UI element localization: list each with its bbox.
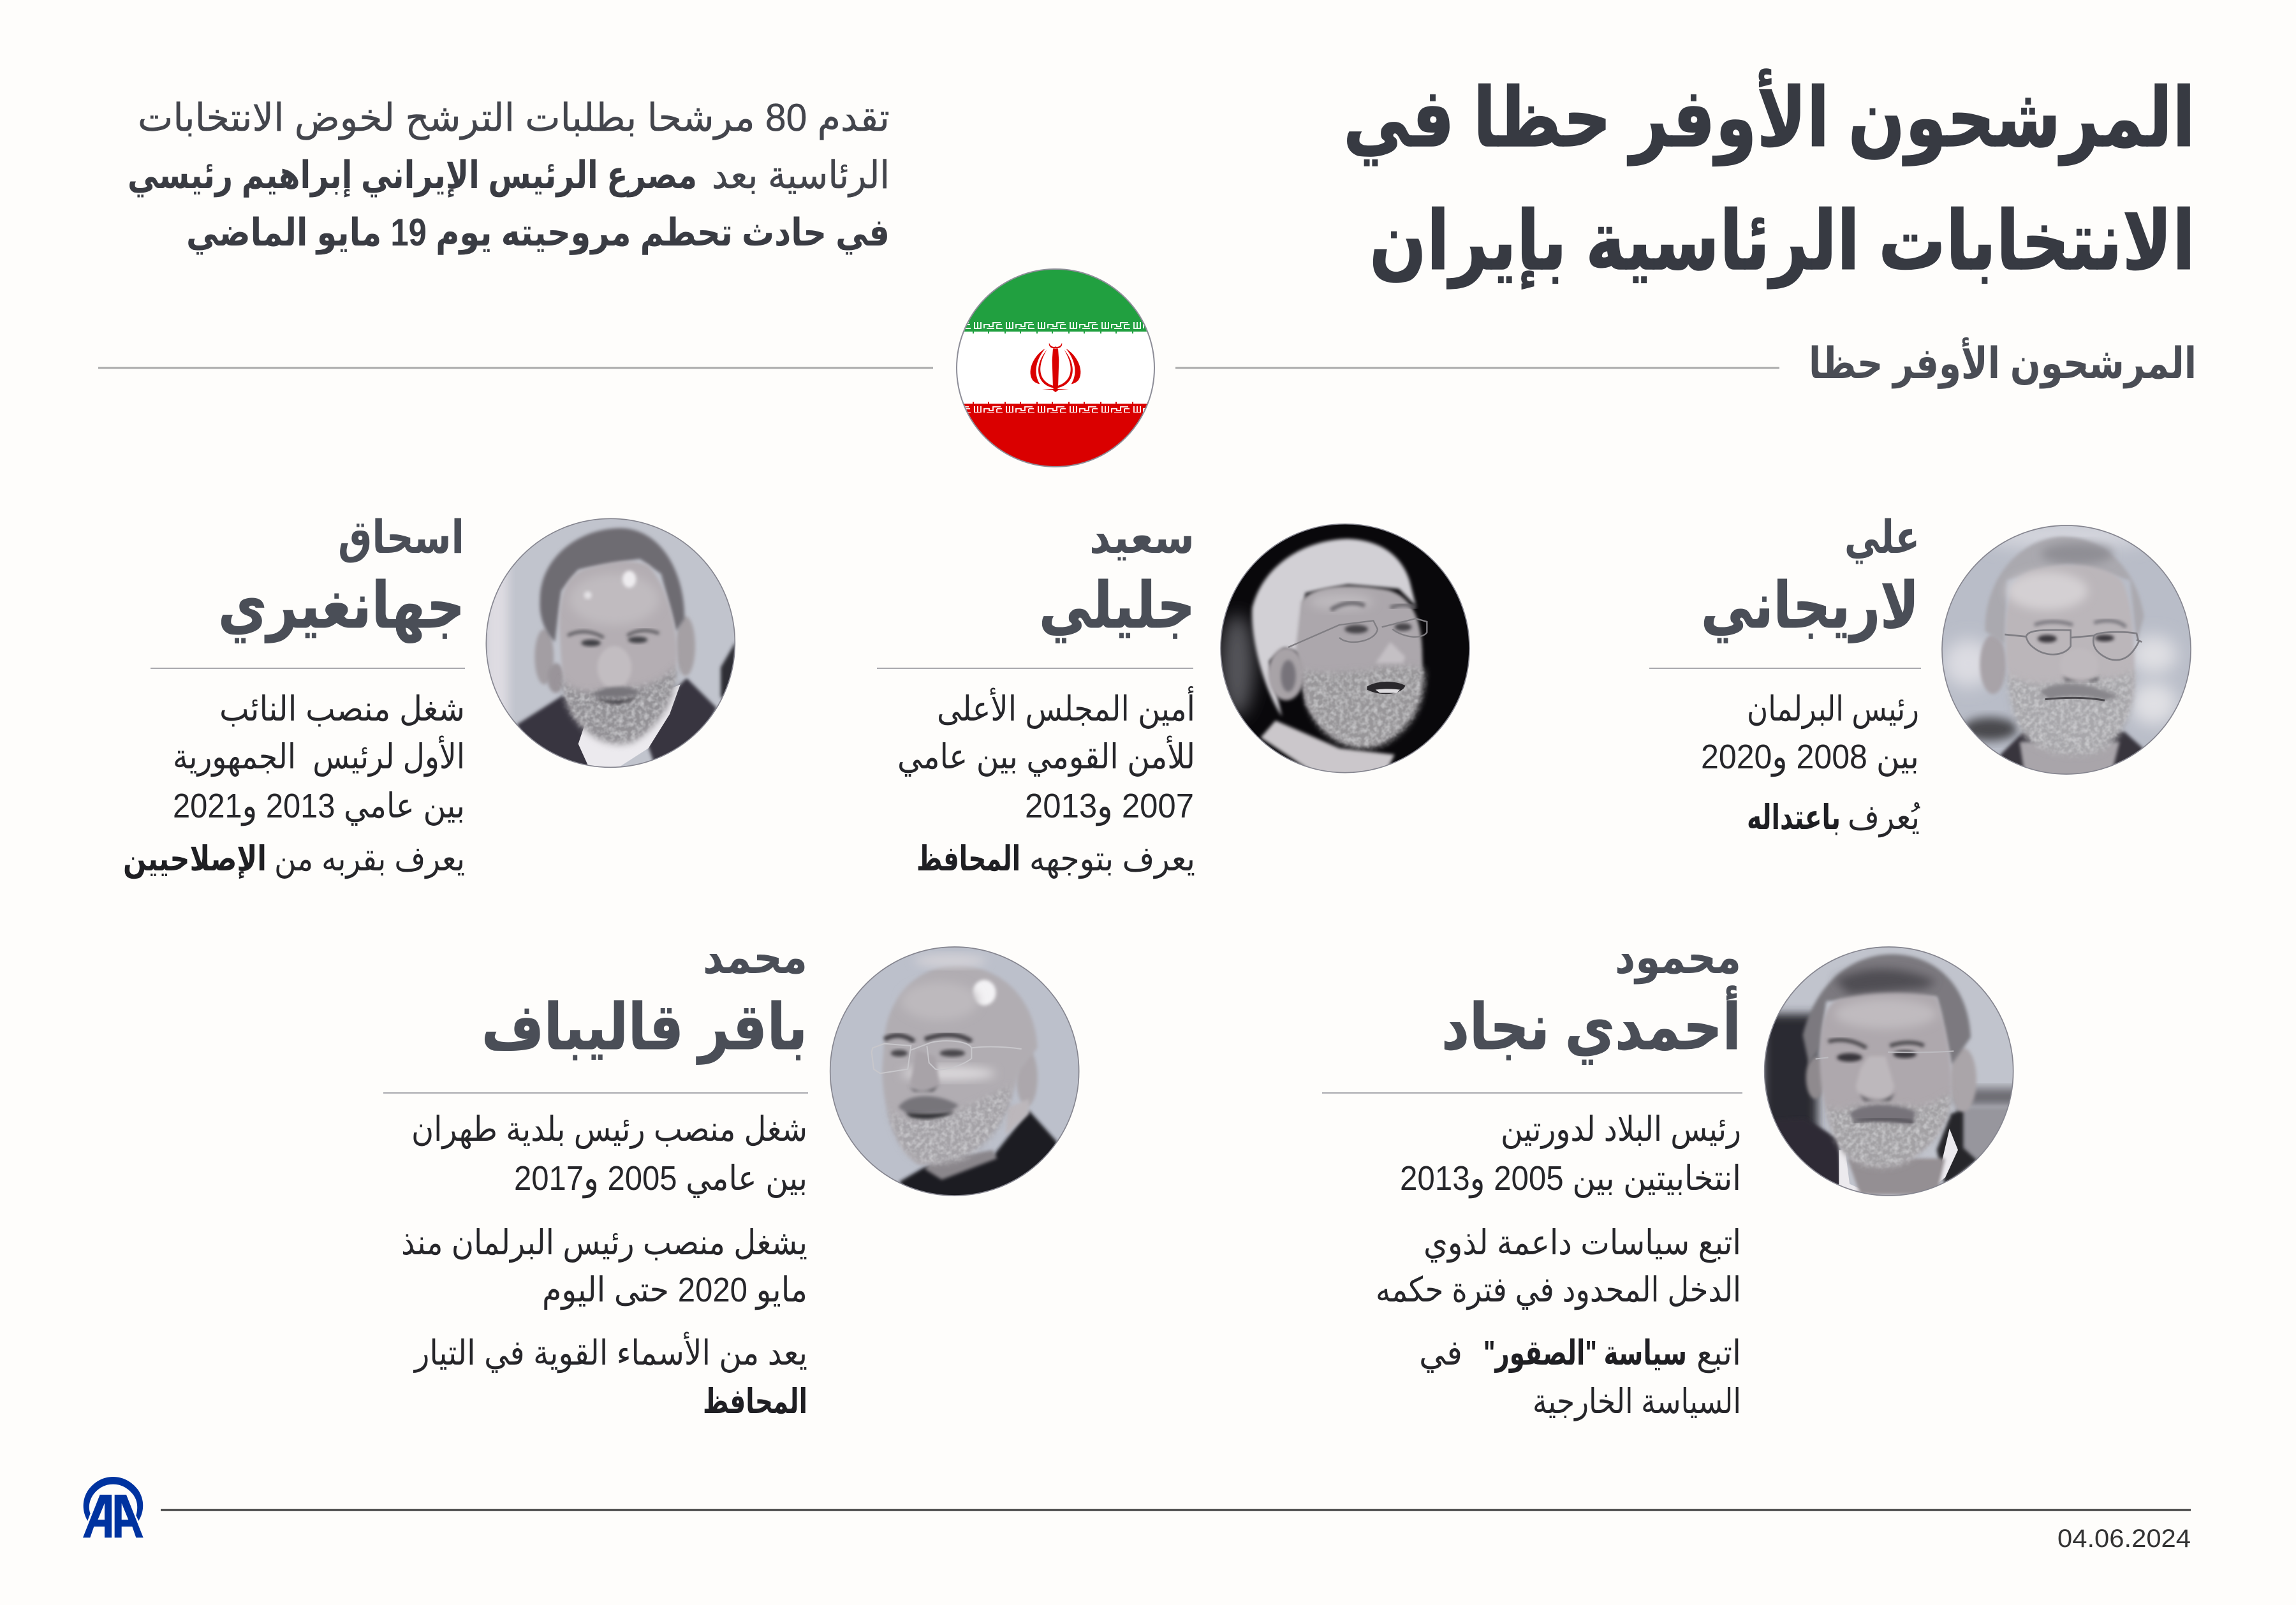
- bio: Jahangiri: يعرف بقربه من: [274, 840, 465, 879]
- bio: Ahmadinejad: اتبع سياسات داعمة لذوي: [1424, 1224, 1741, 1263]
- bio: Ahmadinejad: في: [1419, 1334, 1462, 1373]
- bio: Ghalibaf: مايو 2020 حتى اليوم: [542, 1271, 807, 1310]
- bio: Ghalibaf: [401, 1110, 807, 1421]
- bio: Ghalibaf: شغل منصب رئيس بلدية طهران: [411, 1110, 807, 1149]
- bio: Jahangiri: شغل منصب النائب: [219, 690, 465, 728]
- portrait: Ahmadinejad: [1764, 946, 2014, 1196]
- bio: Ahmadinejad: اتبع: [1696, 1334, 1741, 1374]
- panel: Ali Larijani: [1649, 512, 2200, 837]
- bio: Jahangiri: بين عامي 2013 و2021: [173, 787, 465, 826]
- intro text block: مصرع الرئيس الإيراني إبراهيم رئيسي: [128, 154, 697, 198]
- bio: Ahmadinejad: سياسة "الصقور": [1483, 1334, 1687, 1373]
- bio: Jahangiri: الإصلاحيين: [123, 840, 267, 879]
- name: Jahangiri: [218, 512, 465, 643]
- intro text block: الرئاسية بعد: [712, 154, 890, 198]
- date: 04.06.2024: [2057, 1525, 2191, 1553]
- panel: Eshaq Jahangiri: [123, 510, 746, 879]
- bio: Larijani: رئيس البرلمان: [1747, 690, 1919, 729]
- name: Jalili: جليلي: [1039, 570, 1195, 643]
- bio: Jalili: للأمن القومي بين عامي: [897, 735, 1195, 777]
- bio: Ghalibaf: المحافظ: [703, 1382, 807, 1421]
- bio: Ghalibaf: يشغل منصب رئيس البرلمان منذ: [401, 1224, 807, 1263]
- portrait: Ghalibaf: [829, 946, 1079, 1196]
- bio: Larijani: باعتداله: [1747, 798, 1841, 837]
- name: Jalili: سعيد: [1089, 512, 1195, 563]
- name: Jahangiri: جهانغيري: [218, 570, 465, 643]
- icon: Iranian flag: [956, 268, 1155, 467]
- panel: Mahmoud Ahmadinejad: [1322, 932, 2022, 1421]
- bio: Larijani: بين 2008 و2020: [1701, 738, 1919, 777]
- bio: Larijani: يُعرف: [1848, 798, 1920, 837]
- bio: Jalili: [897, 686, 1195, 879]
- panel: Saeed Jalili: [877, 512, 1480, 879]
- bio: Ahmadinejad: [1376, 1110, 1741, 1421]
- bio: Jalili: 2007 و2013: [1025, 787, 1194, 826]
- name: Larijani: لاريجاني: [1701, 570, 1919, 643]
- bio: Ghalibaf: بين عامي 2005 و2017: [514, 1159, 807, 1198]
- name: Ghalibaf: باقر قاليباف: [482, 992, 807, 1065]
- name: Jalili: [1039, 512, 1195, 643]
- name: Ahmadinejad: محمود: [1615, 932, 1741, 985]
- name: Jahangiri: اسحاق: [338, 512, 464, 563]
- name: Ghalibaf: [482, 932, 807, 1065]
- portrait: Jalili: [1220, 523, 1470, 773]
- bio: Jahangiri: [123, 690, 465, 879]
- section heading: المرشحون الأوفر حظا: [1809, 337, 2197, 389]
- name: Larijani: [1701, 512, 1920, 643]
- bio: Larijani: [1701, 690, 1920, 837]
- bio: Ghalibaf: يعد من الأسماء القوية في التيار: [413, 1331, 807, 1373]
- intro text block: في حادث تحطم مروحيته يوم 19 مايو الماضي: [186, 211, 890, 255]
- bio: Ahmadinejad: الدخل المحدود في فترة حكمه: [1376, 1271, 1741, 1310]
- bio: Jalili: يعرف بتوجهه: [1029, 840, 1195, 879]
- bio: Jalili: المحافظ: [916, 840, 1020, 878]
- bio: Jahangiri: الأول لرئيس الجمهورية: [173, 735, 465, 777]
- bio: Ahmadinejad: السياسة الخارجية: [1533, 1382, 1741, 1421]
- bio: Ahmadinejad: انتخابيتين بين 2005 و2013: [1400, 1159, 1741, 1198]
- name: Ahmadinejad: [1441, 932, 1741, 1064]
- name: Larijani: علي: [1844, 512, 1920, 564]
- panel: Mohammad Bagher Ghalibaf: [383, 932, 1091, 1421]
- bio: Ahmadinejad: رئيس البلاد لدورتين: [1501, 1110, 1741, 1149]
- portrait: Larijani: [1941, 525, 2191, 775]
- name: Ghalibaf: محمد: [703, 932, 807, 983]
- intro text block: [128, 96, 890, 255]
- portrait: Jahangiri: [486, 518, 736, 768]
- intro text block: تقدم 80 مرشحا بطلبات الترشح لخوض الانتخابات: [138, 96, 890, 140]
- title: [1343, 69, 2195, 289]
- icon: Anadolu Agency logo: [83, 1477, 144, 1537]
- name: Ahmadinejad: أحمدي نجاد: [1441, 985, 1741, 1064]
- bio: Jalili: أمين المجلس الأعلى: [937, 686, 1195, 729]
